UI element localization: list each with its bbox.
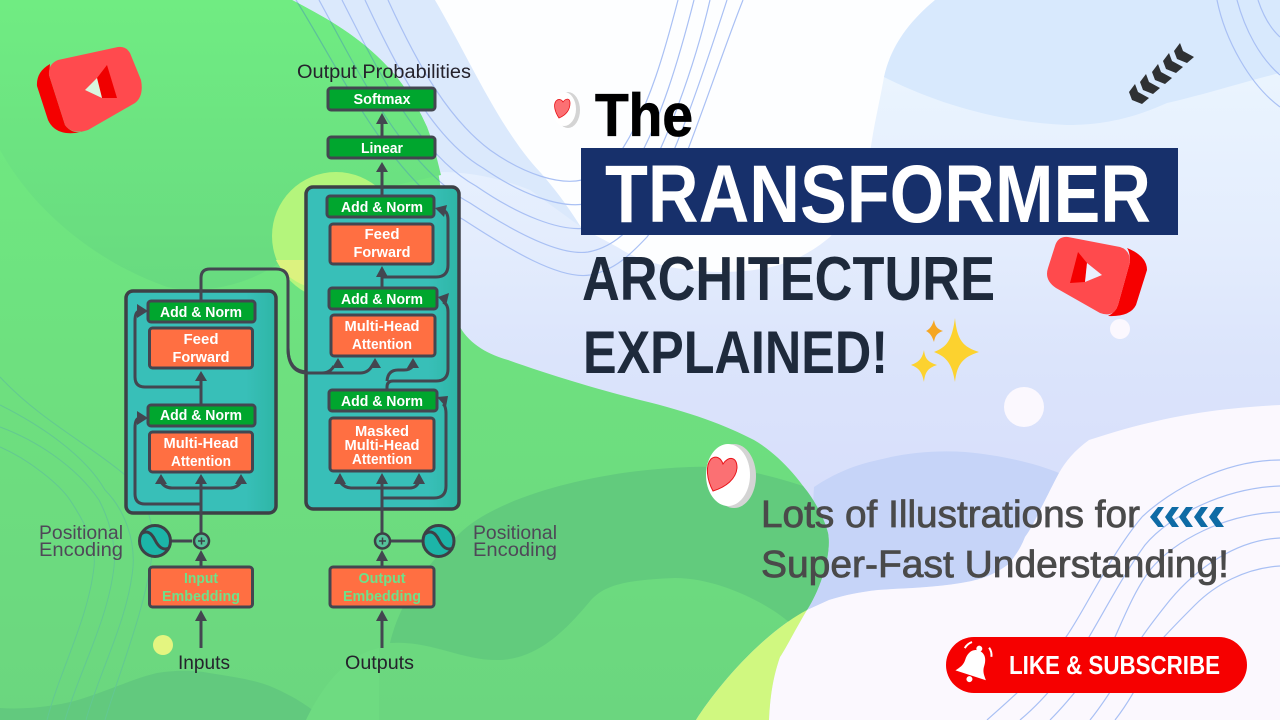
transformer diagram (39, 62, 557, 674)
Input Embedding: Input (184, 570, 218, 587)
subtitle: Lots of Illustrations for (761, 494, 1140, 536)
Add and Norm: Add & Norm (160, 407, 242, 424)
Output Embedding (330, 567, 434, 607)
Masked Multi-Head Attention: Masked (355, 423, 409, 440)
sine wave encoding icon (423, 526, 454, 556)
input stack (39, 523, 252, 674)
sine wave encoding icon (140, 526, 170, 556)
encoder panel (126, 269, 334, 533)
Add and Norm: Add & Norm (341, 291, 423, 308)
Feed Forward: Feed (184, 331, 218, 348)
subtitle: Super-Fast Understanding! (761, 544, 1229, 586)
Positional Encoding label: Positional (473, 523, 557, 544)
title: Explained: EXPLAINED! (583, 319, 888, 386)
add node (194, 534, 209, 548)
decorative white dots (1004, 319, 1130, 427)
lime circle behind decoder (272, 172, 400, 300)
Positional Encoding label: Positional (39, 523, 123, 544)
icon: red play button left (37, 47, 142, 133)
Feed Forward (330, 224, 433, 264)
Masked Multi-Head Attention (330, 418, 434, 471)
Feed Forward: Forward (172, 349, 230, 366)
Multi-Head Attention (331, 315, 435, 356)
Multi-Head Attention: Attention (171, 453, 231, 470)
decoder connections (288, 113, 449, 533)
icon: dark chevrons (1129, 43, 1194, 104)
icon: bell (953, 640, 996, 687)
Linear (328, 137, 435, 158)
icon: heart coin small (552, 92, 580, 128)
Softmax: Softmax (354, 91, 411, 108)
Input Embedding (150, 567, 252, 607)
green blob (0, 0, 829, 720)
Positional Encoding label (473, 523, 557, 561)
Multi-Head Attention: Multi-Head (164, 435, 238, 452)
lime dot (153, 635, 173, 655)
Outputs: Outputs (345, 653, 414, 674)
Positional Encoding label (39, 523, 123, 561)
Add and Norm (327, 196, 434, 217)
output stack (330, 523, 557, 674)
Feed Forward (150, 328, 252, 368)
icon: blue chevrons (1150, 507, 1224, 527)
like and subscribe button (946, 637, 1247, 693)
icon: sparkles (911, 318, 979, 382)
Softmax (328, 88, 435, 110)
Multi-Head Attention: Multi-Head (344, 318, 420, 335)
Output Embedding: Embedding (343, 588, 421, 605)
Positional Encoding label: Encoding (473, 540, 557, 561)
Feed Forward: Feed (364, 226, 400, 243)
Positional Encoding label: Encoding (39, 540, 123, 561)
subtitle (761, 494, 1229, 586)
Feed Forward: Forward (354, 244, 410, 261)
Masked Multi-Head Attention: Attention (352, 451, 412, 468)
encoder connections (135, 269, 334, 533)
Output Probabilities: Output Probabilities (297, 62, 471, 83)
Add and Norm (148, 405, 255, 426)
title: The: The (595, 82, 693, 149)
Inputs: Inputs (178, 653, 230, 674)
add node (375, 534, 390, 548)
Add and Norm: Add & Norm (341, 393, 423, 410)
Multi-Head Attention: Attention (352, 336, 412, 353)
icon: heart coin large (706, 444, 756, 508)
Output Embedding: Output (358, 570, 406, 587)
like and subscribe button: LIKE & SUBSCRIBE (1009, 650, 1220, 680)
Multi-Head Attention (150, 432, 252, 472)
Add and Norm: Add & Norm (160, 304, 242, 321)
title: Transformer banner: TRANSFORMER (605, 149, 1151, 240)
Add and Norm: Add & Norm (341, 199, 423, 216)
decoder panel (288, 113, 459, 533)
icon: red play button right (1047, 237, 1147, 316)
top curves (296, 0, 743, 276)
Input Embedding: Embedding (162, 588, 240, 605)
Masked Multi-Head Attention: Multi-Head (344, 437, 420, 454)
Add and Norm (329, 288, 437, 309)
Add and Norm (329, 390, 437, 411)
Linear: Linear (361, 140, 403, 157)
Add and Norm (148, 301, 255, 322)
title: Architecture: ARCHITECTURE (582, 245, 995, 314)
